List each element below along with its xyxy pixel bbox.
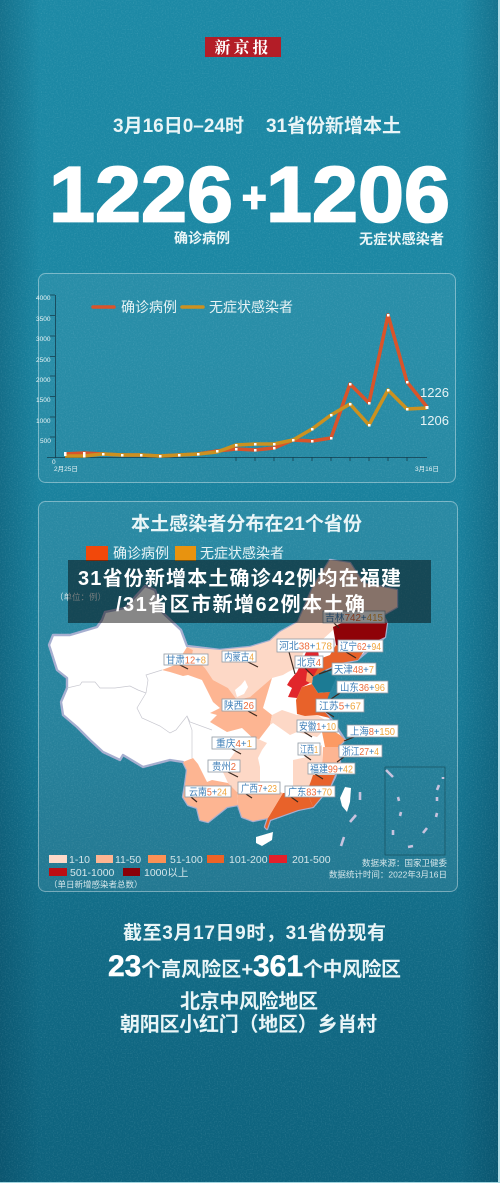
- map legend: case ranges: （单日新增感染者总数）: [49, 880, 143, 890]
- province: Anhui and Shanghai: [322, 730, 345, 747]
- chart axis labels: 0: [52, 459, 56, 466]
- label: Fujian: 福建99+42: [310, 762, 353, 776]
- big numbers: 1226: [49, 150, 233, 238]
- label: Shaanxi: [222, 699, 257, 716]
- label: Beijing: [295, 656, 323, 676]
- national outline: [49, 560, 397, 829]
- label: Jiangsu: 江苏5+67: [319, 700, 361, 712]
- map unit note: （单位：例）: [55, 592, 106, 602]
- chart axis labels: 2500: [36, 357, 51, 364]
- map legend: case types: 无症状感染者: [200, 545, 284, 561]
- map of China: [49, 560, 445, 855]
- map legend: case ranges: 1000以上: [144, 867, 188, 879]
- province: Hebei: [287, 650, 320, 698]
- data source: [329, 858, 447, 880]
- province: Ningxia: [235, 680, 248, 697]
- heading: date and scope: 31省份新增本土: [266, 115, 401, 137]
- map legend: case types: [86, 545, 284, 561]
- label: Gansu: [164, 654, 208, 669]
- label: Inner Mongolia: 内蒙古4: [224, 650, 254, 664]
- risk areas text: [108, 922, 401, 1036]
- chart axis labels: 4000: [36, 295, 51, 302]
- province: Gansu: [162, 647, 237, 708]
- chart markers: [64, 314, 428, 458]
- map legend: case types: 确诊病例: [113, 545, 169, 561]
- label: Yunnan: [185, 786, 231, 802]
- label: Shandong: [328, 681, 388, 701]
- province: Guizhou and Chongqing: [222, 738, 267, 792]
- chart axis labels: [36, 295, 439, 473]
- province: Tianjin: [306, 672, 313, 684]
- label: Inner Mongolia: [222, 650, 258, 667]
- label: Beijing: 北京4: [297, 656, 321, 669]
- label: Liaoning: [338, 640, 383, 658]
- heading: date and scope: 3月16日0–24时: [113, 115, 244, 137]
- label: Tianjin: [319, 663, 376, 676]
- map legend: case ranges: 101-200: [229, 854, 268, 866]
- label: Guangdong: [285, 786, 335, 802]
- label: Jilin: 吉林742+415: [325, 611, 383, 624]
- label: Guangxi: 广西7+23: [241, 783, 277, 795]
- province: Shandong and Jiangsu: [296, 684, 330, 718]
- chart legend: 确诊病例: [121, 299, 177, 315]
- label: Zhejiang: [337, 745, 382, 762]
- heading: date and scope: [113, 115, 401, 137]
- label: Shaanxi: 陕西26: [224, 699, 254, 712]
- big numbers: 无症状感染者: [359, 231, 444, 247]
- big numbers: [49, 150, 450, 247]
- label: Shandong: 山东36+96: [340, 681, 385, 694]
- label: Hebei: [277, 639, 334, 674]
- province: Yunnan: [183, 758, 238, 822]
- label: Fujian: [308, 762, 355, 779]
- chart axis labels: 3月16日: [415, 465, 439, 473]
- chart axis labels: 2000: [36, 377, 51, 384]
- label: Guangdong: 广东83+70: [288, 786, 332, 798]
- map labels: [164, 611, 398, 802]
- label: Chongqing: [212, 737, 256, 754]
- line: asymptomatic cases: [65, 390, 427, 456]
- chart axis labels: 3000: [36, 336, 51, 343]
- map heading: 本土感染者分布在21个省份: [131, 513, 362, 535]
- province: Guangdong: [265, 792, 313, 829]
- island: Taiwan: [340, 787, 351, 812]
- chart end labels: [420, 385, 449, 428]
- data source: 数据来源：国家卫健委: [362, 858, 447, 868]
- label: Anhui: [297, 720, 338, 737]
- inset: South China Sea: [385, 767, 445, 855]
- banner overlay: 31省份新增本土确诊42例均在福建: [78, 567, 401, 590]
- risk areas text: 23: [108, 950, 141, 983]
- chart legend: 无症状感染者: [209, 299, 293, 315]
- risk areas text: 个高风险区+: [141, 957, 253, 981]
- risk areas text: 朝阳区小红门（地区）乡肖村: [120, 1012, 377, 1036]
- map legend: case ranges: 11-50: [115, 854, 141, 866]
- panel: map: [38, 502, 458, 892]
- province: Guangxi: [237, 787, 283, 821]
- province: Liaoning: [303, 640, 368, 677]
- chart legend: [93, 299, 293, 315]
- province: Jiangxi: [293, 745, 322, 792]
- chart axis labels: 3500: [36, 316, 51, 323]
- label: Tianjin: 天津48+7: [334, 664, 374, 676]
- map legend: case ranges: 1-10: [69, 854, 90, 866]
- risk areas text: 个中风险区: [303, 957, 401, 981]
- chart axis labels: 2月25日: [54, 465, 78, 473]
- province: Henan Shandong inland: [270, 710, 325, 737]
- label: Yunnan: 云南5+24: [189, 786, 227, 798]
- line: confirmed cases: [65, 315, 427, 456]
- label: Shanghai: 上海8+150: [350, 725, 395, 738]
- chart end labels: 1206: [420, 413, 449, 428]
- South China Sea dashes: [341, 792, 360, 846]
- big numbers: 1206: [266, 150, 450, 238]
- label: Guizhou: 贵州2: [212, 760, 236, 773]
- chart axis labels: 1500: [36, 397, 51, 404]
- province borders: [67, 670, 212, 758]
- label: Chongqing: 重庆4+1: [216, 737, 252, 750]
- big numbers: +: [242, 174, 267, 221]
- logo: 新京报: 新京报: [214, 38, 272, 57]
- label: Jiangxi: 江西1: [300, 744, 318, 756]
- label: Jiangxi: [298, 743, 320, 760]
- map legend: case ranges: 51-100: [170, 854, 203, 866]
- risk areas text: 截至3月17日9时，31省份现有: [123, 922, 386, 944]
- label: Gansu: 甘肃12+8: [166, 654, 206, 666]
- Inner Mongolia and Northeast: [187, 560, 397, 700]
- label: Shanghai: [344, 725, 398, 741]
- logo: 新京报: [205, 37, 281, 57]
- label: Anhui: 安徽1+10: [299, 720, 336, 733]
- big numbers: 确诊病例: [174, 230, 230, 246]
- chart end labels: 1226: [420, 385, 449, 400]
- province: Jilin: [333, 622, 387, 650]
- chart axis labels: 1000: [36, 418, 51, 425]
- label: Hebei: 河北38+178: [279, 640, 332, 652]
- province: Shaanxi: [210, 678, 272, 742]
- chart axes: [47, 295, 427, 461]
- map legend: case ranges: 501-1000: [70, 867, 115, 879]
- data source: 数据统计时间：2022年3月16日: [329, 870, 447, 880]
- map legend: case ranges: [49, 854, 331, 890]
- label: Guizhou: [208, 760, 240, 777]
- map legend: case ranges: 201-500: [292, 854, 331, 866]
- Bohai sea: [312, 670, 336, 693]
- banner overlay: [68, 560, 431, 623]
- province: Zhejiang: [322, 747, 340, 775]
- label: Jiangsu: [316, 699, 364, 717]
- chart axis labels: 500: [40, 438, 51, 445]
- label: Guangxi: [238, 782, 280, 798]
- risk areas text: 北京中风险地区: [180, 989, 318, 1013]
- banner overlay: /31省区市新增62例本土确: [116, 592, 365, 616]
- province: Fujian: [307, 775, 335, 807]
- label: Liaoning: 辽宁62+94: [340, 640, 381, 653]
- risk areas text: 361: [253, 950, 303, 983]
- label: Jilin: [323, 611, 385, 628]
- panel: trend chart: [36, 274, 456, 482]
- label: Zhejiang: 浙江27+4: [342, 746, 379, 758]
- island: Hainan: [256, 832, 273, 846]
